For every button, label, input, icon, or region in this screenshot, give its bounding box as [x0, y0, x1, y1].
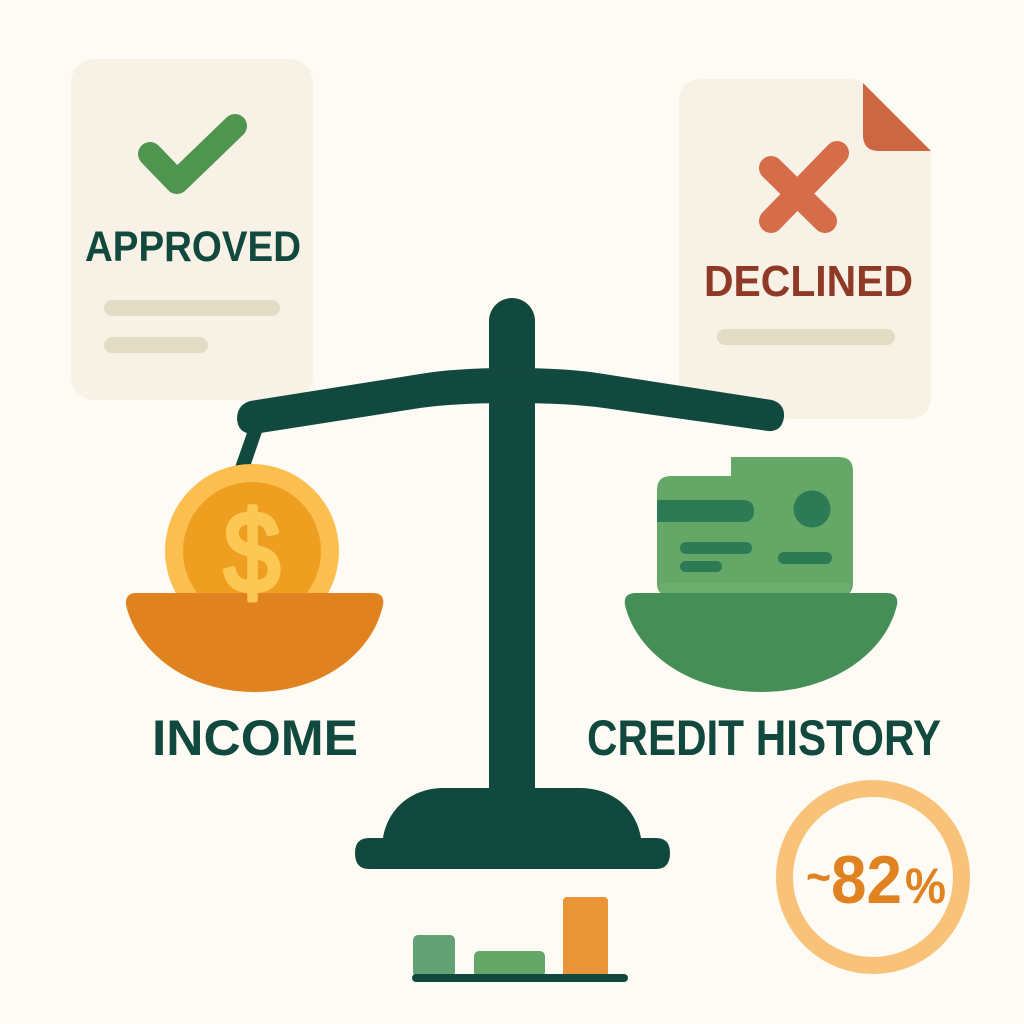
panel: declined document — [679, 79, 931, 419]
icon: dollar sign: $ — [224, 489, 280, 617]
heading: approved: APPROVED — [85, 223, 301, 271]
label: income: INCOME — [152, 710, 358, 766]
callout: approximately 82 percent — [784, 788, 962, 966]
icon: folded corner — [863, 83, 931, 151]
text placeholder line 1 — [104, 300, 280, 316]
icon: x mark — [771, 153, 837, 221]
icon: credit card — [657, 457, 853, 596]
callout: approximately 82 percent: ~ — [806, 851, 831, 904]
text placeholder line — [717, 329, 895, 345]
icon: income bowl — [126, 593, 383, 692]
bar chart — [412, 897, 628, 982]
icon: coin — [165, 430, 339, 638]
icon: credit bowl — [625, 593, 897, 692]
callout: approximately 82 percent: % — [905, 858, 946, 914]
label: credit history: CREDIT HISTORY — [587, 710, 941, 766]
text placeholder line 2 — [104, 337, 208, 353]
icon: balance scale — [237, 298, 784, 869]
icon: check mark — [150, 126, 235, 182]
panel: approved document — [71, 59, 313, 400]
callout: approximately 82 percent: 82 — [831, 842, 902, 918]
heading: declined: DECLINED — [704, 257, 913, 306]
